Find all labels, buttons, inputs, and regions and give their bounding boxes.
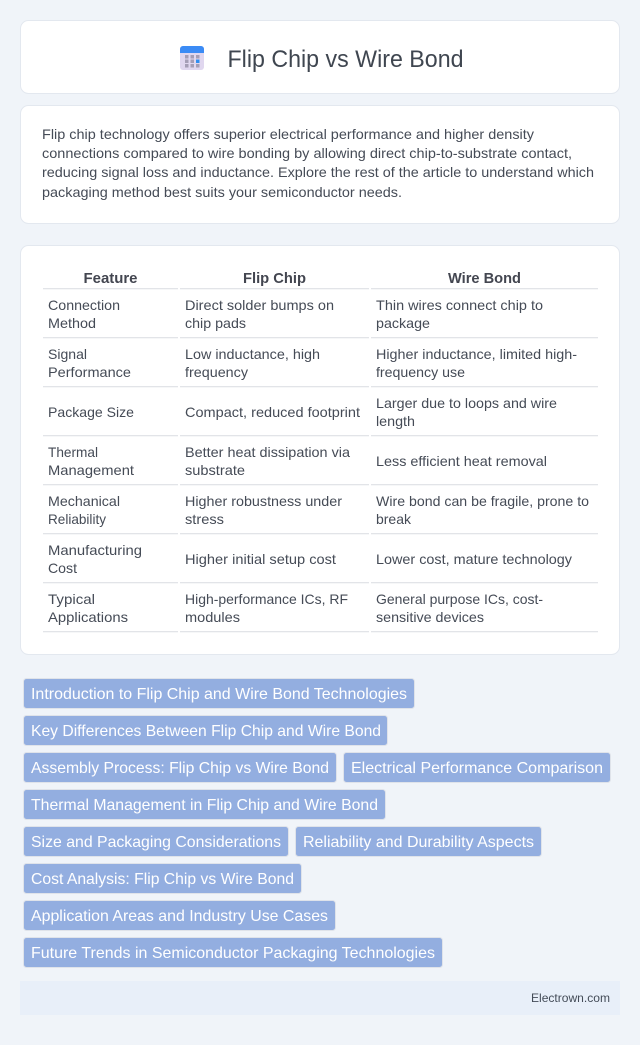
row: package size: Package Size (48, 404, 134, 420)
tag list: article sections: Electrical Performance Comparison (351, 760, 603, 777)
tag list: article sections: Key Differences Between Flip Chip and Wire Bond (31, 723, 381, 740)
row: manufacturing cost: Cost (48, 560, 77, 576)
row: thermal management: Thermal (48, 444, 98, 460)
row: package size: Larger due to loops and wire (376, 395, 557, 411)
tag list: article sections: Introduction to Flip Chip and Wire Bond Technologies (31, 686, 407, 703)
footer: Electrown.com (531, 991, 610, 1005)
row: connection method: Thin wires connect chip to (376, 297, 543, 313)
tag list: article sections: Thermal Management in Flip Chip and Wire Bond (31, 797, 378, 814)
table header: Flip Chip (243, 270, 306, 287)
row: manufacturing cost: Lower cost, mature technology (376, 551, 572, 567)
row: typical applications: modules (185, 609, 240, 625)
row: signal performance: Low inductance, high (185, 346, 320, 362)
row: signal performance: Performance (48, 364, 131, 380)
row: mechanical reliability: stress (185, 511, 224, 527)
row: connection method: Method (48, 315, 96, 331)
row: mechanical reliability: Mechanical (48, 493, 120, 509)
row: signal performance: frequency use (376, 364, 465, 380)
tag list: article sections: Future Trends in Semiconductor Packaging Technologies (31, 945, 435, 962)
panel: comparison table (20, 246, 620, 654)
row: manufacturing cost (48, 542, 572, 576)
tag list: article sections: Cost Analysis: Flip Chip vs Wire Bond (31, 871, 294, 888)
row: thermal management: Better heat dissipation via (185, 444, 350, 460)
icon: calendar chip (180, 46, 204, 70)
table grid lines (43, 288, 598, 632)
tag list: article sections (24, 678, 610, 968)
row: connection method: Direct solder bumps on (185, 297, 334, 313)
row: mechanical reliability: Higher robustness under (185, 493, 342, 509)
row: typical applications: Typical (48, 591, 95, 607)
panel: intro text (20, 106, 620, 224)
panel: intro text: reducing signal loss and inductance. Explore the rest of the article to understand which (42, 164, 594, 180)
row: typical applications (48, 591, 543, 625)
header card (20, 20, 620, 94)
tag list: article sections: Assembly Process: Flip Chip vs Wire Bond (31, 760, 329, 777)
row: typical applications: sensitive devices (376, 609, 484, 625)
row: signal performance (48, 346, 577, 380)
row: package size: Compact, reduced footprint (185, 404, 360, 420)
panel: intro text: packaging method best suits your semiconductor needs. (42, 184, 402, 200)
table header (84, 270, 521, 287)
tag list: article sections: Size and Packaging Considerations (31, 834, 281, 851)
panel: intro text: connections compared to wire bonding by allowing direct chip-to-substrate contact, (42, 145, 572, 161)
row: signal performance: frequency (185, 364, 248, 380)
row: mechanical reliability: Reliability (48, 511, 106, 527)
row: manufacturing cost: Manufacturing (48, 542, 142, 558)
row: connection method: Connection (48, 297, 120, 313)
table header: Wire Bond (448, 270, 521, 287)
row: manufacturing cost: Higher initial setup cost (185, 551, 336, 567)
row: signal performance: Higher inductance, limited high- (376, 346, 577, 362)
tag list: article sections: Reliability and Durability Aspects (303, 834, 534, 851)
tag list: article sections: Application Areas and Industry Use Cases (31, 908, 328, 925)
row: thermal management: Less efficient heat removal (376, 453, 547, 469)
title: Flip Chip vs Wire Bond (228, 46, 464, 73)
row: typical applications: General purpose ICs, cost- (376, 591, 543, 607)
row: typical applications: High-performance ICs, RF (185, 591, 348, 607)
row: typical applications: Applications (48, 609, 128, 625)
row: connection method (48, 297, 543, 331)
row: mechanical reliability: Wire bond can be fragile, prone to (376, 493, 589, 509)
row: thermal management: Management (48, 462, 134, 478)
row: connection method: package (376, 315, 430, 331)
row: signal performance: Signal (48, 346, 87, 362)
panel: intro text: Flip chip technology offers superior electrical performance and higher density (42, 126, 534, 142)
row: package size: length (376, 413, 415, 429)
footer (20, 981, 620, 1015)
row: connection method: chip pads (185, 315, 246, 331)
row: mechanical reliability (48, 493, 589, 527)
row: package size (48, 395, 557, 429)
row: thermal management (48, 444, 547, 478)
row: mechanical reliability: break (376, 511, 412, 527)
row: thermal management: substrate (185, 462, 245, 478)
table header: Feature (84, 270, 138, 287)
